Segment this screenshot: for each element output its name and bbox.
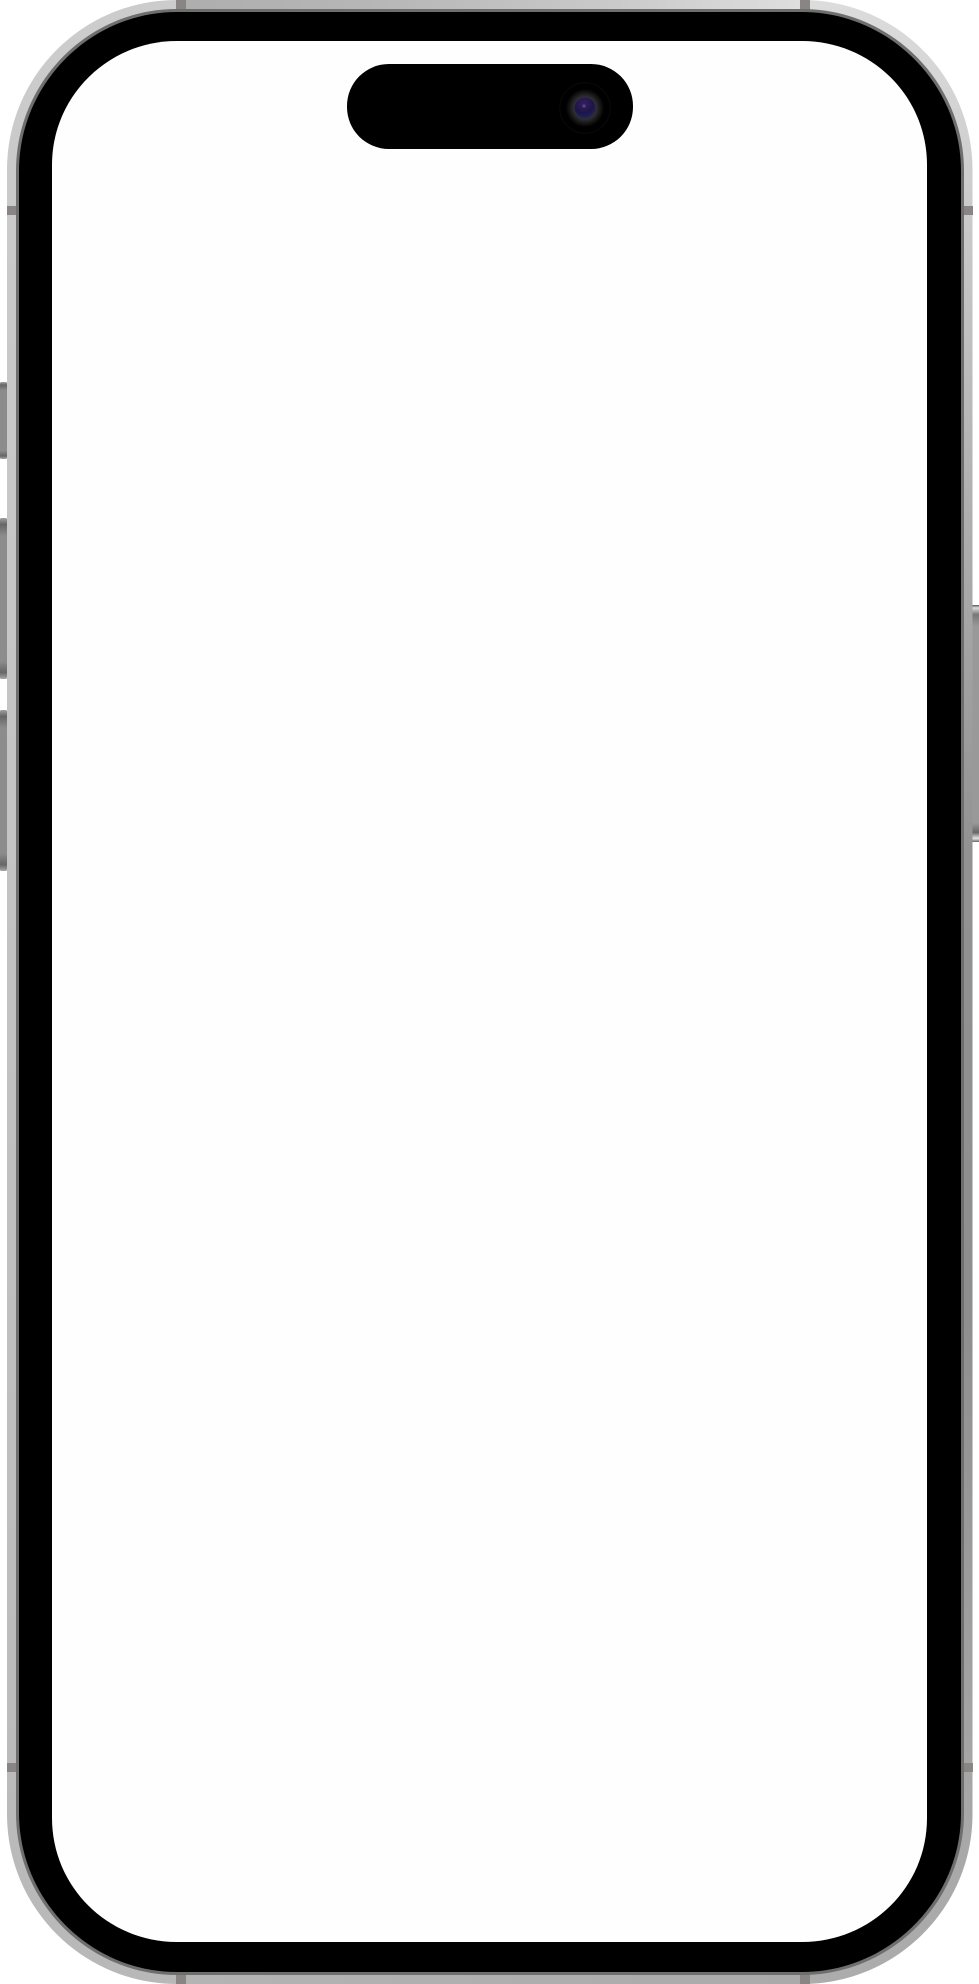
side buttons: left (action, volume up, volume down)	[0, 382, 7, 871]
dynamic island	[347, 64, 633, 149]
icon: front camera	[559, 82, 611, 134]
side button: right (power)	[972, 605, 979, 842]
